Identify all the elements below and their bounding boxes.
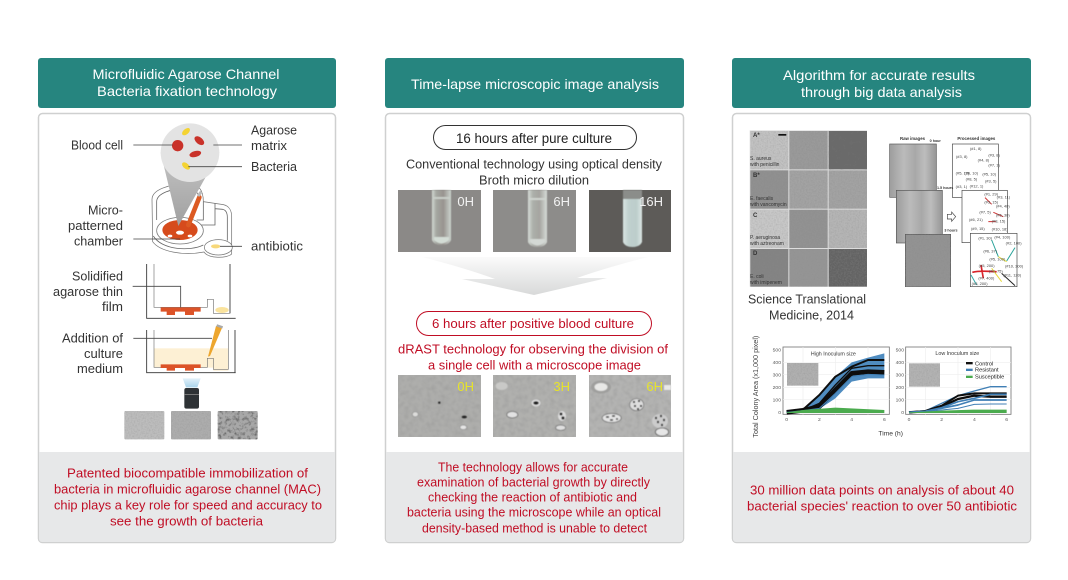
y axis ticks: right: 500 [896, 347, 904, 353]
processed image stack: (#1, 29) [984, 192, 999, 197]
labels: micrograph grid: with penicillin [750, 162, 780, 168]
processed image stack: (#12, 1) [970, 184, 984, 189]
labels: diagram: antibiotic [251, 238, 304, 254]
pill: 6 hours after positive blood culture [416, 312, 652, 336]
tube photo 16H [589, 190, 671, 252]
processed image stack: (#4, 100) [994, 235, 1011, 240]
time labels: Processed images [957, 136, 996, 141]
x axis ticks [785, 417, 1008, 423]
microscopy photo 3H [493, 375, 576, 437]
plot: low inoculum size: Low Inoculum size [935, 351, 979, 357]
x axis ticks: 6 [1005, 417, 1008, 423]
caption: patented immobilization: Patented biocompatible immobilization of [67, 466, 308, 480]
caption: 30 million data points: 30 million data points on analysis of about 40 [750, 482, 1014, 498]
magnified agarose matrix [161, 123, 219, 182]
heading: algorithm [732, 58, 1031, 108]
x axis ticks: 0 [908, 417, 911, 423]
x axis ticks: 6 [883, 417, 886, 423]
tube photo 6H [493, 190, 576, 252]
panel: microfluidic agarose channel [38, 58, 336, 542]
heading: time-lapse analysis [385, 58, 684, 108]
pill: 16 hours after pure culture: 16 hours after pure culture [456, 130, 612, 146]
labels: micrograph grid: with aztreonam [750, 241, 784, 247]
processed image stack: (#8, 5) [966, 177, 978, 182]
processed image stack: (#4, 8) [978, 158, 990, 163]
arrow: down [422, 257, 648, 295]
labels: diagram: chamber [74, 234, 124, 248]
panel card background [386, 114, 684, 542]
tube photo 0H: 0H [457, 194, 474, 209]
processed image stack: (#8, 75) [989, 268, 1003, 273]
y axis title: Total Colony Area (x1,000 pixel) [751, 336, 760, 438]
processed image stack [952, 144, 1024, 287]
tube photo 16H: 16H [639, 194, 663, 209]
chart: total colony area over time [751, 336, 1011, 438]
caption: patented immobilization: chip plays a key role for speed and accuracy to [54, 498, 322, 512]
heading: microfluidic agarose channel: Microfluidic Agarose Channel [92, 66, 280, 82]
heading: microfluidic agarose channel [38, 58, 336, 108]
panel: time-lapse microscopic image analysis [385, 58, 684, 542]
cross section: culture medium added [133, 325, 236, 373]
labels: diagram: Solidified [72, 268, 123, 284]
y axis ticks: right [896, 347, 904, 416]
y axis ticks: left: 500 [773, 347, 781, 353]
labels: micrograph grid: C [753, 213, 758, 219]
labels: diagram: film [102, 299, 123, 314]
processed image stack: (#8, 200) [972, 281, 988, 286]
labels: micrograph grid: with vancomycin [750, 202, 787, 208]
microscopy photo 0H: 0H [457, 379, 474, 394]
microscopy photo 6H: 6H [646, 379, 663, 394]
x axis ticks: 4 [850, 417, 853, 423]
cross section: solidified agarose film [133, 264, 236, 318]
y axis ticks: left: 0 [778, 410, 781, 416]
processed image stack: (#6, 37) [983, 248, 998, 253]
heading: algorithm: through big data analysis [801, 84, 962, 100]
text: conventional technology: Broth micro dilution [479, 172, 589, 188]
microscopy photo 0H [398, 375, 481, 437]
caption: accurate examination: checking the reaction of antibiotic and [428, 490, 637, 504]
caption: accurate examination: density-based method is unable to detect [422, 520, 647, 536]
text: citation: Science Translational [748, 292, 866, 306]
processed image stack: (#5, 30) [996, 212, 1010, 217]
text: conventional technology: Conventional technology using optical density [406, 156, 662, 172]
y axis ticks: right: 0 [901, 410, 904, 416]
y axis ticks: right: 200 [896, 385, 904, 391]
processed image stack: (#4, 40) [996, 204, 1010, 209]
time labels [900, 136, 996, 233]
x axis ticks: 2 [940, 417, 943, 423]
legend: Resistant [975, 368, 999, 374]
labels: diagram: Agarose [251, 122, 297, 138]
microscopy photo 6H [589, 375, 671, 437]
labels: diagram: Blood cell [71, 138, 123, 152]
processed image stack: (#6, 21) [969, 217, 983, 222]
processed image stack: (#3, 1) [956, 184, 968, 189]
y axis ticks: left: 400 [773, 360, 781, 366]
labels: micrograph grid: S. aureus [750, 156, 772, 162]
text: dRAST technology: dRAST technology for observing the division of [398, 342, 668, 356]
tube photo 0H [398, 190, 481, 252]
processed image stack: (#5, 10) [982, 172, 997, 177]
caption background [733, 452, 1030, 542]
heading: time-lapse analysis: Time-lapse microscopic image analysis [411, 76, 659, 92]
processed image stack: (#3, 8) [988, 152, 1001, 157]
labels: diagram: agarose thin [53, 284, 123, 299]
caption: 30 million data points: bacterial species' reaction to over 50 antibiotic [747, 498, 1017, 514]
icon: microscope objective [183, 378, 201, 409]
legend: Control [975, 361, 993, 367]
text: conventional technology [406, 156, 662, 188]
time labels: 0 hour [930, 139, 941, 143]
caption: 30 million data points [747, 482, 1017, 514]
text: dRAST technology [398, 342, 668, 372]
arrow: right [947, 212, 956, 221]
processed image stack: (#2, 100) [1006, 240, 1022, 245]
processed image stack: (#3, 15) [984, 200, 999, 205]
microscope thumbnails [124, 411, 258, 439]
processed image stack: (#3, 5) [985, 178, 997, 183]
text: citation [748, 292, 866, 322]
time labels: Raw images [900, 136, 926, 141]
text: citation: Medicine, 2014 [769, 308, 854, 322]
y axis ticks: right: 400 [896, 360, 904, 366]
photo row: single cell microscopy [398, 375, 671, 437]
caption: patented immobilization: bacteria in microfluidic agarose channel (MAC) [54, 482, 321, 496]
labels: diagram: medium [77, 361, 123, 376]
leader lines [133, 145, 242, 246]
y axis ticks: left: 100 [773, 397, 781, 403]
processed image stack: (#7, 5) [979, 209, 992, 214]
legend [966, 361, 1004, 381]
plot: high inoculum size [783, 347, 889, 414]
processed image stack: (#3, 8) [956, 154, 968, 159]
labels: diagram: matrix [251, 138, 288, 153]
figure: raw and processed images [890, 136, 1024, 287]
time labels: 1.5 hours [937, 186, 953, 190]
x axis ticks: 2 [818, 417, 821, 423]
plot: low inoculum size [906, 347, 1011, 414]
x axis ticks: 0 [785, 417, 788, 423]
processed image stack: (#7, 1) [988, 163, 1001, 168]
processed image stack: (#5, 200) [979, 263, 995, 268]
labels: micrograph grid: P. aeruginosa [750, 235, 780, 241]
y axis ticks: right: 100 [896, 397, 904, 403]
text: dRAST technology: a single cell with a microscope image [428, 358, 641, 372]
heading: microfluidic agarose channel: Bacteria fixation technology [97, 83, 277, 99]
labels: diagram [53, 122, 304, 376]
caption: accurate examination: examination of bacterial growth by directly [417, 474, 650, 490]
labels: diagram: culture [84, 346, 123, 361]
x axis ticks: 4 [973, 417, 976, 423]
processed image stack: (#6, 10) [964, 170, 979, 175]
caption: patented immobilization [54, 466, 322, 528]
caption background [386, 452, 683, 542]
panel card background [38, 114, 336, 542]
processed image stack: (#10, 300) [1005, 264, 1024, 269]
panel: big data algorithm [732, 58, 1031, 542]
labels: micrograph grid: with imipenem [750, 280, 782, 286]
y axis ticks: right: 300 [896, 372, 904, 378]
labels: micrograph grid: B* [753, 173, 760, 179]
plot: high inoculum size: High Inoculum size [811, 352, 856, 358]
heading: algorithm: Algorithm for accurate results [783, 67, 975, 83]
processed image stack: (#10, 18) [992, 227, 1008, 232]
caption: patented immobilization: see the growth of bacteria [110, 514, 264, 528]
magnified view cone [161, 153, 219, 226]
raw image stack [890, 144, 951, 287]
caption: accurate examination: The technology allows for accurate [438, 460, 628, 474]
chip device outline [152, 184, 232, 257]
pill: 16 hours after pure culture [434, 126, 636, 150]
pill: 6 hours after positive blood culture: 6 hours after positive blood culture [432, 316, 634, 331]
labels: diagram: Addition of [62, 330, 123, 346]
labels: micrograph grid: D [753, 251, 758, 257]
panel card background [732, 114, 1030, 542]
diagram: MAC chip [124, 123, 258, 439]
figure: micrograph grid [750, 130, 867, 287]
photo row: broth tubes [398, 190, 671, 252]
processed image stack: (#1, 8) [970, 146, 982, 151]
processed image stack: (#5, 12) [956, 171, 970, 176]
time labels: 3 hours [944, 229, 958, 233]
y axis ticks: left [773, 347, 781, 416]
processed image stack: (#7, 400) [978, 275, 995, 280]
processed image stack: (#8, 15) [992, 218, 1006, 223]
labels: micrograph grid: E. coli [750, 274, 764, 280]
y axis ticks: left: 300 [773, 372, 781, 378]
tube photo 6H: 6H [553, 194, 570, 209]
x axis title: Time (h) [878, 430, 903, 437]
labels: micrograph grid: E. faecalis [750, 196, 774, 202]
caption background [39, 452, 335, 542]
y axis ticks: left: 200 [773, 385, 781, 391]
labels: diagram: Micro- [88, 202, 123, 218]
labels: diagram: Bacteria [251, 159, 298, 174]
processed image stack: (#11, 120) [1003, 273, 1022, 278]
labels: micrograph grid [750, 133, 787, 286]
processed image stack: (#5, 100) [989, 256, 1006, 261]
processed image stack: (#9, 15) [971, 226, 985, 231]
microscopy photo 3H: 3H [553, 379, 570, 394]
legend: Susceptible [975, 375, 1004, 381]
labels: micrograph grid: A* [753, 133, 760, 139]
caption: accurate examination [407, 460, 661, 536]
processed image stack: (#3, 11) [997, 194, 1011, 199]
caption: accurate examination: bacteria using the microscope while an optical [407, 504, 661, 520]
labels: diagram: patterned [68, 218, 123, 233]
processed image stack: (#1, 30) [978, 235, 993, 240]
